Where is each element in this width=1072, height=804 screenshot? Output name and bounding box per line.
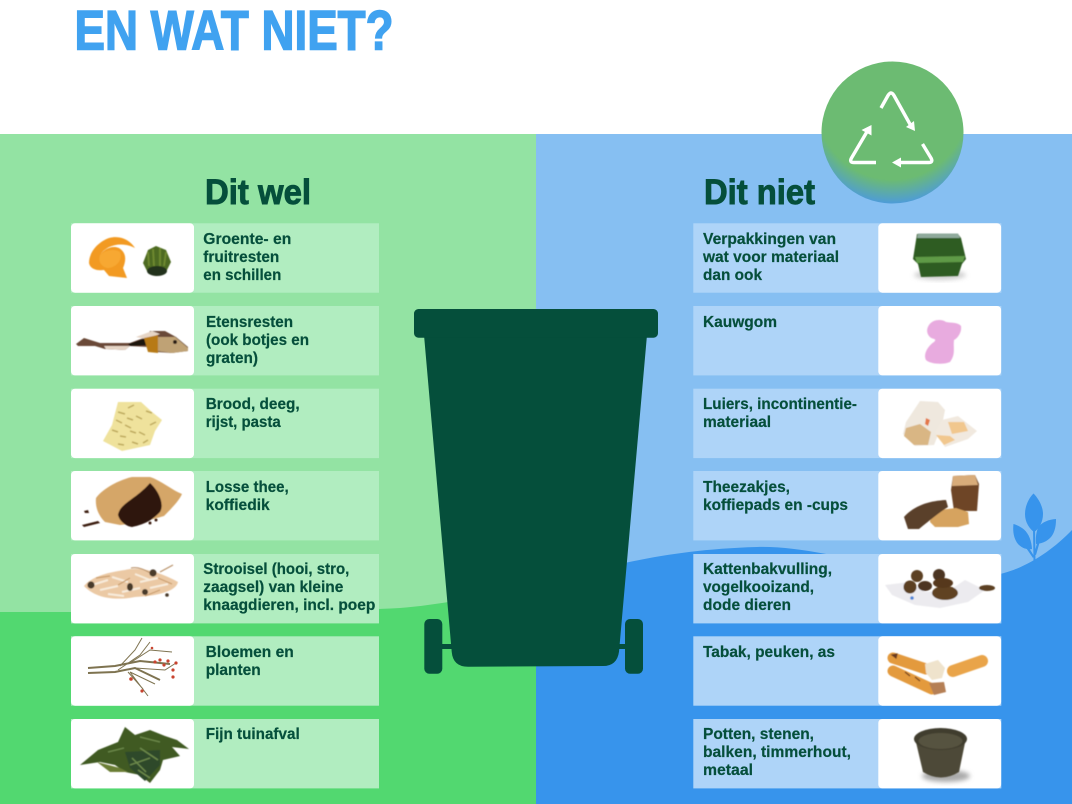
text: balken, timmerhout,: [703, 744, 851, 761]
card: groente en fruitresten: [71, 223, 379, 293]
text: [703, 479, 848, 514]
text: [702, 231, 839, 284]
text: [703, 396, 857, 431]
photo: diapers: [903, 401, 977, 447]
photo: sawdust with droppings: [84, 565, 178, 599]
text: [203, 561, 375, 614]
text: materiaal: [703, 414, 771, 431]
photo: garden clippings: [80, 727, 189, 783]
text: Strooisel (hooi, stro,: [203, 561, 349, 578]
photo: pasta: [103, 402, 162, 451]
card: etensresten: [71, 306, 379, 375]
card: kauwgom: [693, 306, 1001, 375]
photo: coffee grounds in filter: [82, 477, 182, 527]
photo: plant pot: [914, 728, 970, 782]
card: verpakkingen: [693, 223, 1001, 293]
card: tabak: [693, 636, 1001, 706]
heading: dit wel: Dit wel: [205, 173, 311, 212]
card: kattenbakvulling: [693, 554, 1001, 623]
text: koffiedik: [206, 497, 270, 514]
text: Fijn tuinafval: [206, 726, 300, 743]
panel: white header background: [0, 0, 1072, 134]
text: [206, 644, 294, 679]
text: Kauwgom: [703, 314, 777, 331]
text: [206, 314, 309, 367]
text: graten): [206, 350, 258, 367]
text: Theezakjes,: [703, 479, 790, 496]
photo: cigarette butts: [892, 654, 982, 695]
card: potten, stenen: [693, 719, 1001, 788]
text: Groente- en: [203, 231, 291, 248]
card: brood, pasta: [71, 389, 379, 458]
card: fijn tuinafval: [71, 719, 379, 788]
card: theezakjes: [693, 471, 1001, 540]
heading: dit niet: Dit niet: [704, 173, 815, 212]
card: strooisel: [71, 554, 379, 623]
text: koffiepads en -cups: [703, 497, 848, 514]
panel: dit niet background: [536, 134, 1072, 804]
text: [703, 561, 832, 614]
text: Tabak, peuken, as: [703, 644, 835, 661]
text: [203, 231, 291, 284]
photo: chewing gum: [925, 320, 961, 364]
text: Etensresten: [206, 314, 293, 331]
photo: tea bags and coffee pads: [904, 475, 979, 529]
card: luiers: [693, 389, 1001, 458]
icon: green waste bin: [414, 309, 658, 674]
title: EN WAT NIET?: [74, 0, 394, 62]
panel: dit wel background: [0, 134, 536, 804]
card: losse thee, koffiedik: [71, 471, 379, 540]
text: Losse thee,: [206, 479, 289, 496]
text: (ook botjes en: [206, 332, 309, 349]
icon: plant: [1013, 494, 1056, 562]
text: fruitresten: [203, 249, 279, 266]
photo: cat litter: [885, 569, 995, 608]
text: en schillen: [203, 267, 281, 284]
photo: orange peel and squash: [89, 237, 171, 278]
text: [206, 479, 289, 514]
text: [703, 726, 851, 779]
text: zaagsel) van kleine: [203, 579, 344, 596]
text: wat voor materiaal: [702, 249, 839, 266]
text: Kattenbakvulling,: [703, 561, 832, 578]
photo: branches with berries: [88, 638, 178, 696]
text: rijst, pasta: [206, 414, 281, 431]
text: knaagdieren, incl. poep: [203, 597, 375, 614]
card: bloemen en planten: [71, 636, 379, 706]
photo: plastic tray: [913, 234, 966, 280]
text: planten: [206, 662, 261, 679]
text: dan ook: [703, 267, 762, 284]
text: dode dieren: [703, 597, 791, 614]
text: Verpakkingen van: [703, 231, 836, 248]
text: [206, 396, 300, 431]
text: Bloemen en: [206, 644, 294, 661]
icon: recycling badge: [822, 62, 964, 204]
text: Brood, deeg,: [206, 396, 300, 413]
text: metaal: [703, 762, 753, 779]
text: Luiers, incontinentie-: [703, 396, 857, 413]
text: vogelkooizand,: [703, 579, 814, 596]
text: Potten, stenen,: [703, 726, 814, 743]
photo: fish: [76, 331, 188, 353]
